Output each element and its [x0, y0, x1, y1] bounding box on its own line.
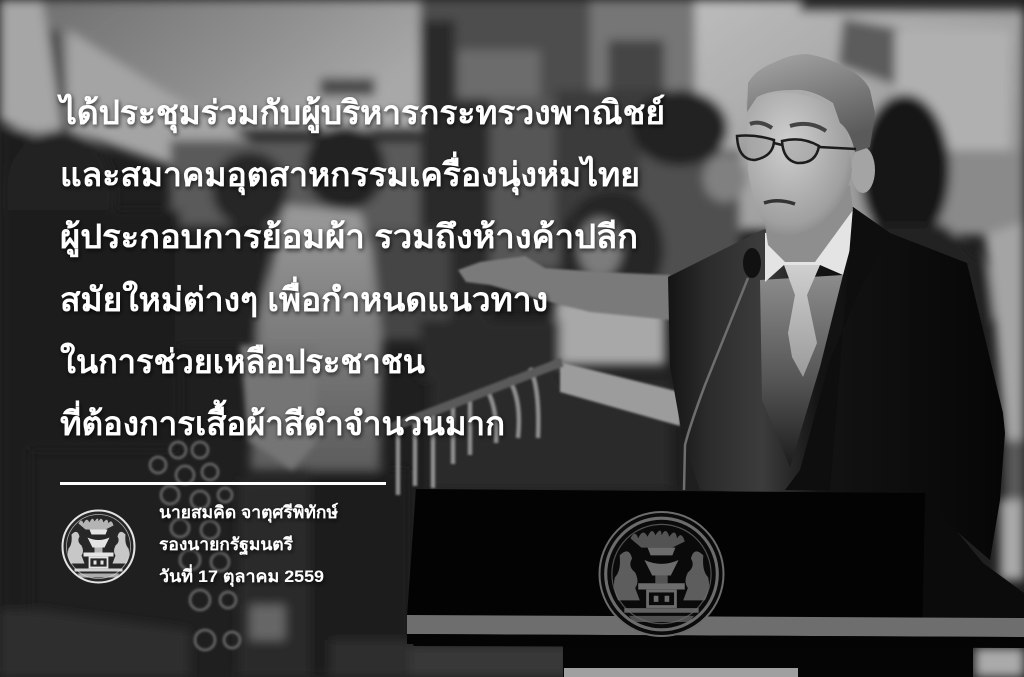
- podium top: [407, 489, 926, 644]
- speaker title: รองนายกรัฐมนตรี: [159, 534, 294, 556]
- headline text: [57, 93, 665, 442]
- divider rule: [60, 482, 386, 485]
- presenter figure: [668, 54, 1005, 560]
- eyebrows: [750, 123, 826, 131]
- headline line 3: ผู้ประกอบการย้อมผ้า รวมถึงห้างค้าปลีก: [60, 218, 638, 258]
- date: วันที่ 17 ตุลาคม 2559: [159, 564, 324, 587]
- government seal emblem: [62, 510, 136, 584]
- headline line 4: สมัยใหม่ต่างๆ เพื่อกำหนดแนวทาง: [60, 276, 548, 318]
- headline line 2: และสมาคมอุตสาหกรรมเครื่องนุ่งห่มไทย: [60, 151, 640, 196]
- tie: [784, 265, 820, 377]
- shirt collar: [765, 209, 857, 282]
- podium: [407, 489, 1024, 677]
- attribution text: [159, 502, 338, 587]
- podium band: [407, 615, 1024, 637]
- microphone: [684, 248, 761, 490]
- background: arm pointing: [458, 256, 670, 320]
- podium seal: [600, 512, 724, 636]
- waistcoat: [760, 275, 843, 467]
- suit jacket: [668, 207, 1005, 560]
- jacket lapel: [785, 207, 890, 490]
- headline line 1: ได้ประชุมร่วมกับผู้บริหารกระทรวงพาณิชย์: [57, 93, 665, 134]
- ear: [851, 147, 875, 193]
- headline line 6: ที่ต้องการเสื้อผ้าสีดำจำนวนมาก: [60, 399, 505, 442]
- speaker name: นายสมคิด จาตุศรีพิทักษ์: [159, 502, 338, 523]
- podium side wing: [922, 493, 1024, 645]
- face: [746, 93, 852, 237]
- hair: [747, 54, 875, 152]
- glasses: [737, 136, 856, 163]
- podium base: [563, 645, 973, 677]
- background: hangers: [390, 362, 562, 495]
- neck: [765, 185, 853, 262]
- podium bright strip: [564, 668, 798, 677]
- podium lower edge: [407, 634, 1024, 648]
- background: clothes rack: [560, 362, 680, 426]
- mouth: [764, 201, 795, 204]
- background: light scarf: [240, 345, 318, 470]
- background: patterned dress: [150, 442, 240, 650]
- headline line 5: ในการช่วยเหลือประชาชน: [60, 342, 425, 380]
